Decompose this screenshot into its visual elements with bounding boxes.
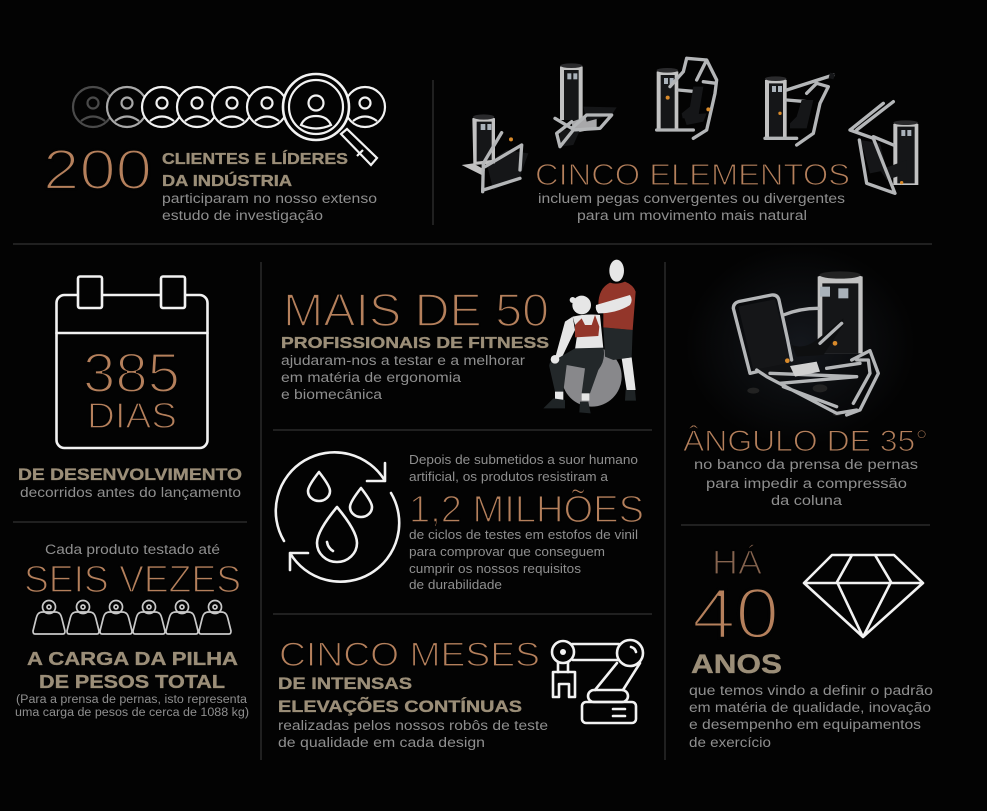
heading: total weight stack xyxy=(27,649,238,692)
text: quality robots xyxy=(278,718,548,750)
text: spine protection: da coluna xyxy=(771,493,843,508)
image: machine 5 xyxy=(850,102,918,193)
icon: six weights xyxy=(33,600,231,634)
text: defining the standard: que temos vindo a definir o padrão xyxy=(689,683,933,698)
text: each product: Cada produto testado até xyxy=(45,542,220,557)
heading: cinco elementos: CINCO ELEMENTOS xyxy=(535,157,850,192)
text: spine protection xyxy=(694,457,918,508)
heading: 1,2 milhoes: 1,2 MILHÕES xyxy=(409,487,644,531)
text: grips xyxy=(538,191,845,223)
heading: de desenvolvimento: DE DESENVOLVIMENTO xyxy=(18,465,242,484)
text: defining the standard xyxy=(689,683,933,750)
text: test cycles xyxy=(409,528,638,592)
text: ergonomics xyxy=(281,353,526,402)
text: ergonomics: em matéria de ergonomia xyxy=(281,370,462,385)
heading: cinco meses: CINCO MESES xyxy=(279,636,540,674)
heading: angulo: ÂNGULO DE 35° xyxy=(683,425,928,458)
image: machine 1 xyxy=(462,114,528,192)
panel: 385 days xyxy=(18,276,242,500)
text: defining the standard: de exercício xyxy=(689,735,771,750)
panel: fitness professionals xyxy=(281,260,636,413)
heading: total weight stack: A CARGA DA PILHA xyxy=(27,649,238,669)
text: leg press note: (Para a prensa de pernas, isto representa xyxy=(16,694,248,706)
icon: calendar xyxy=(56,276,208,448)
illustration: trainers with ball xyxy=(543,260,636,413)
text: research study xyxy=(162,191,377,223)
text: spine protection: no banco da prensa de pernas xyxy=(694,457,918,472)
icon: people row with magnifier xyxy=(73,74,385,165)
heading: continuous lifts: DE INTENSAS xyxy=(278,675,412,693)
text: grips: para um movimento mais natural xyxy=(577,208,807,223)
heading: continuous lifts: ELEVAÇÕES CONTÍNUAS xyxy=(278,696,522,716)
text: sweat intro xyxy=(409,453,638,484)
text: leg press note xyxy=(15,694,249,719)
heading: total weight stack: DE PESOS TOTAL xyxy=(39,672,225,692)
label: dias: DIAS xyxy=(87,395,177,436)
text: test cycles: cumprir os nossos requisitos xyxy=(409,562,581,576)
image: machine 3 xyxy=(657,58,717,138)
text: ergonomics: e biomecânica xyxy=(281,387,383,402)
text: research study: participaram no nosso extenso xyxy=(162,191,377,206)
icon: diamond xyxy=(804,555,923,637)
text: quality robots: realizadas pelos nossos robôs de teste xyxy=(278,718,548,733)
panel: 40 years xyxy=(689,544,933,750)
text: leg press note: uma carga de pesos de cerca de 1088 kg) xyxy=(15,707,249,719)
heading: clients and leaders: CLIENTES E LÍDERES xyxy=(162,151,348,168)
icon: sweat cycle with drops xyxy=(276,452,399,582)
image: machine 4 xyxy=(765,73,835,145)
text: grips: incluem pegas convergentes ou divergentes xyxy=(538,191,845,206)
heading: seis vezes: SEIS VEZES xyxy=(24,559,241,601)
text: test cycles: para comprovar que conseguem xyxy=(409,545,605,559)
panel: 1.2 million xyxy=(276,452,644,592)
icon: robot arm xyxy=(552,640,643,723)
panel: 200 clients xyxy=(43,74,385,223)
text: defining the standard: em matéria de qualidade, inovação xyxy=(689,700,931,715)
panel: five elements xyxy=(462,58,918,223)
text: before launch: decorridos antes do lançamento xyxy=(20,485,241,500)
heading: anos: ANOS xyxy=(691,649,782,679)
heading: continuous lifts xyxy=(278,675,522,716)
number: 385: 385 xyxy=(83,341,180,404)
text: test cycles: de durabilidade xyxy=(409,578,502,592)
number: 40: 40 xyxy=(692,575,779,654)
heading: clients and leaders: DA INDÚSTRIA xyxy=(162,172,292,190)
panel: six times xyxy=(15,542,249,719)
text: sweat intro: Depois de submetidos a suor humano xyxy=(409,453,638,467)
panel: five months xyxy=(278,636,643,750)
text: ergonomics: ajudaram-nos a testar e a melhorar xyxy=(281,353,526,368)
heading: profissionais: PROFISSIONAIS DE FITNESS xyxy=(281,335,549,352)
panel: 35 degree angle xyxy=(683,245,928,508)
image: machine 2 xyxy=(555,63,617,147)
text: quality robots: de qualidade em cada design xyxy=(278,735,485,750)
heading: mais de 50: MAIS DE 50 xyxy=(283,284,549,336)
number: 200: 200 xyxy=(43,138,152,202)
text: test cycles: de ciclos de testes em estofos de vinil xyxy=(409,528,638,542)
text: sweat intro: artificial, os produtos resistiram a xyxy=(409,470,608,484)
label: ha: HÁ xyxy=(712,544,762,582)
text: defining the standard: e desempenho em equipamentos xyxy=(689,717,921,732)
image: leg press machine xyxy=(685,245,915,445)
text: research study: estudo de investigação xyxy=(162,208,323,223)
heading: clients and leaders xyxy=(162,151,348,190)
text: spine protection: para impedir a compressão xyxy=(706,476,907,491)
